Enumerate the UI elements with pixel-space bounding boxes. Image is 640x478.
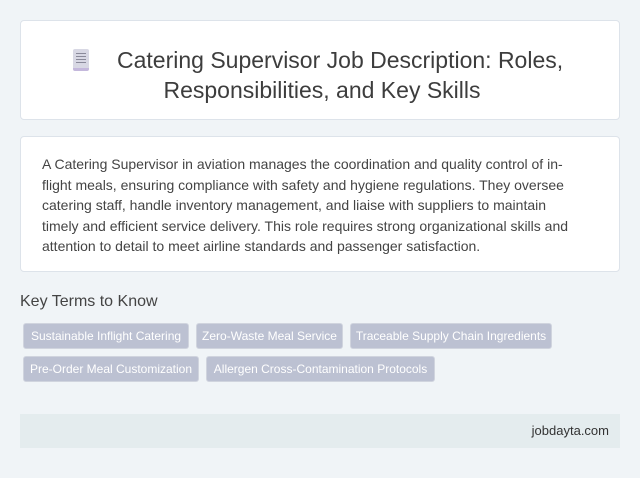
tags: Zero-Waste Meal Service [202, 329, 337, 343]
title card: Responsibilities, and Key Skills [163, 77, 481, 103]
description text: flight meals, ensuring compliance with safety and hygiene regulations. They oversee [42, 176, 564, 192]
icon: document [73, 49, 89, 71]
title card: Catering Supervisor Job Description: Roles, [117, 47, 563, 73]
description text [42, 156, 568, 254]
tags [23, 323, 552, 382]
description text: timely and efficient service delivery. This role requires strong organizational skills and [42, 218, 568, 234]
tags: Sustainable Inflight Catering [31, 329, 181, 343]
heading: key terms: Key Terms to Know [20, 293, 158, 310]
tags: Allergen Cross-Contamination Protocols [214, 362, 427, 376]
title card [20, 20, 620, 120]
footer [20, 414, 620, 448]
description text: catering staff, handle inventory management, and liaise with suppliers to maintain [42, 197, 546, 213]
footer text: jobdayta.com [532, 423, 609, 438]
description card [20, 136, 620, 272]
tags: Pre-Order Meal Customization [30, 362, 192, 376]
title [117, 47, 563, 103]
description text: A Catering Supervisor in aviation manages the coordination and quality control of in- [42, 156, 563, 172]
tags: Traceable Supply Chain Ingredients [356, 329, 546, 343]
description text: attention to detail to meet airline standards and passenger satisfaction. [42, 238, 480, 254]
